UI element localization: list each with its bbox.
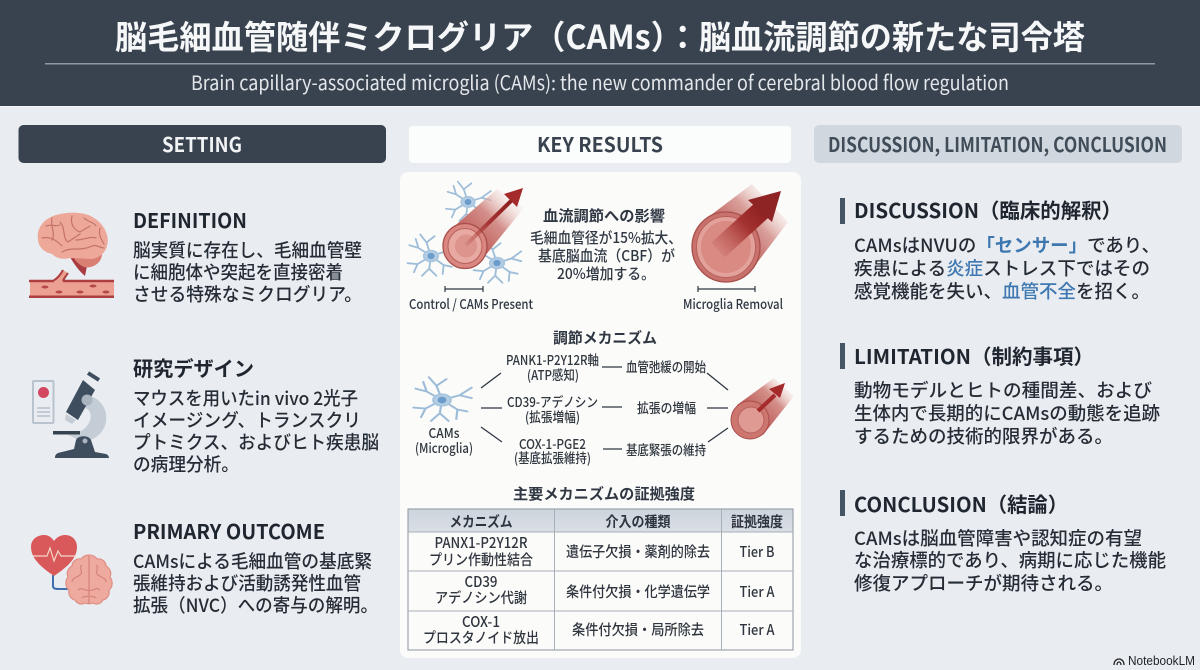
row: PANX1-P2Y12R: PANX1-P2Y12R [434, 532, 528, 553]
heading: definition: DEFINITION [133, 204, 247, 234]
panel: setting header: SETTING [162, 129, 242, 158]
row: CD39: 拡張の増幅 [637, 397, 696, 417]
text: limitation body [854, 377, 1160, 449]
row: CD39 [435, 571, 775, 608]
diagram: mechanism [413, 349, 794, 467]
row: PANX1: PANK1-P2Y12R軸 [506, 349, 599, 369]
heading: discussion: DISCUSSION（臨床的解釈） [854, 194, 1122, 224]
section: conclusion [840, 488, 1166, 596]
row: CD39: CD39-アデノシン [507, 391, 598, 411]
logo: NotebookLM: NotebookLM [1128, 653, 1195, 668]
text: study design body [133, 385, 379, 477]
text: blood flow effect: 20%増加する。 [557, 263, 655, 284]
table header: メカニズム [450, 511, 512, 532]
row: COX-1: COX-1 [462, 611, 500, 632]
text: blood flow effect [530, 205, 682, 284]
row: COX-1: 基底緊張の維持 [626, 439, 706, 459]
icon: heart and brain [31, 535, 112, 604]
row: PANX1-P2Y12R: 遺伝子欠損・薬剤的除去 [566, 541, 710, 562]
row: CD39: Tier A [740, 581, 775, 602]
row: PANX1: (ATP感知) [527, 364, 579, 384]
row: CD39: (拡張増幅) [525, 406, 580, 426]
row: PANX1-P2Y12R [429, 532, 775, 570]
row: COX-1: COX-1-PGE2 [519, 433, 586, 453]
text: conclusion body: 修復アプローチが期待される。 [854, 570, 1113, 596]
table header: 介入の種類 [606, 511, 671, 532]
row: PANX1-P2Y12R: プリン作動性結合 [429, 549, 533, 570]
text: limitation body: 動物モデルとヒトの種間差、および [854, 377, 1152, 403]
text: definition body: 脳実質に存在し、毛細血管壁 [133, 237, 362, 263]
heading: limitation: LIMITATION（制約事項） [854, 340, 1094, 370]
text: blood flow effect: 毛細血管径が15%拡大、 [530, 227, 682, 248]
row: COX-1: プロスタノイド放出 [423, 627, 539, 648]
text: blood flow effect: 血流調節への影響 [543, 205, 665, 226]
row: COX-1 [423, 611, 775, 648]
panel: setting header [18, 125, 386, 163]
text: conclusion body: な治療標的であり、病期に応じた機能 [854, 547, 1166, 573]
icon: microglia cell [413, 377, 473, 457]
icon: microglia cell: (Microglia) [415, 437, 473, 457]
text: limitation body: 生体内で長期的にCAMsの動態を追跡 [854, 400, 1160, 426]
text: discussion body: 疾患による炎症ストレス下ではその [854, 255, 1150, 281]
row: CD39: 条件付欠損・化学遺伝学 [566, 581, 710, 602]
label: control [409, 286, 534, 313]
table header: 証拠強度 [731, 511, 783, 532]
panel: key results header [409, 126, 791, 163]
row: PANX1-P2Y12R: Tier B [740, 541, 775, 562]
section: limitation [840, 340, 1160, 449]
row: CD39: アデノシン代謝 [435, 587, 527, 608]
text: discussion body: CAMsはNVUの「センサー」であり、 [854, 232, 1160, 258]
text: limitation body: するための技術的限界がある。 [854, 423, 1113, 449]
illustration: control vessel with CAMs [408, 182, 524, 283]
row: COX-1 [514, 433, 706, 467]
title: 脳毛細血管随伴ミクログリア（CAMs）：脳血流調節の新たな司令塔 [115, 11, 1085, 59]
label: microglia removal [683, 286, 783, 313]
text: conclusion body [854, 525, 1166, 596]
row: COX-1: 条件付欠損・局所除去 [572, 619, 704, 640]
text: primary outcome body: 拡張（NVC）への寄与の解明。 [133, 592, 378, 618]
label: control: Control / CAMs Present [409, 293, 534, 313]
text: study design body: イメージング、トランスクリ [133, 407, 361, 433]
panel: key results [400, 172, 801, 658]
heading: regulation mechanism: 調節メカニズム [553, 327, 657, 348]
text: blood flow effect: 基底脳血流（CBF）が [538, 245, 675, 266]
text: study design body: マウスを用いたin vivo 2光子 [133, 385, 358, 411]
row: PANX1 [506, 349, 706, 384]
text: primary outcome body: CAMsによる毛細血管の基底緊 [133, 548, 372, 574]
icon: microscope [33, 373, 109, 458]
label: microglia removal: Microglia Removal [683, 293, 783, 313]
table header [450, 511, 783, 532]
text: conclusion body: CAMsは脳血管障害や認知症の有望 [854, 525, 1142, 551]
table: evidence [408, 509, 793, 650]
section: discussion [840, 194, 1160, 304]
text: study design body: の病理分析。 [133, 451, 239, 477]
panel: key results header: KEY RESULTS [537, 129, 663, 158]
text: study design body: プトミクス、およびヒト疾患脳 [133, 429, 379, 455]
subtitle: Brain capillary-associated microglia (CAMs): the new commander of cerebral blood flow regulation [191, 67, 1009, 96]
text: definition body: に細胞体や突起を直接密着 [133, 259, 343, 285]
text: discussion body [854, 232, 1160, 304]
row: CD39 [507, 391, 696, 426]
text: discussion body: 感覚機能を失い、血管不全を招く。 [854, 278, 1150, 304]
text: primary outcome body [133, 548, 378, 618]
heading: conclusion: CONCLUSION（結論） [854, 488, 1068, 518]
illustration: dilated vessel [692, 184, 788, 282]
icon: microglia cell: CAMs [428, 422, 460, 442]
row: CD39: CD39 [464, 571, 498, 592]
heading: study design: 研究デザイン [133, 352, 254, 382]
row: COX-1: Tier A [740, 619, 775, 640]
icon: brain and capillary [29, 213, 114, 298]
header band [0, 0, 1200, 107]
heading: primary outcome: PRIMARY OUTCOME [133, 515, 325, 545]
text: definition body: させる特殊なミクログリア。 [133, 281, 362, 307]
icon: small vessel [731, 378, 794, 439]
row: COX-1: (基底拡張維持) [514, 447, 591, 467]
row: PANX1: 血管弛緩の開始 [626, 356, 706, 376]
text: definition body [133, 237, 362, 307]
text: primary outcome body: 張維持および活動誘発性血管 [133, 570, 361, 596]
heading: evidence strength: 主要メカニズムの証拠強度 [513, 483, 695, 504]
